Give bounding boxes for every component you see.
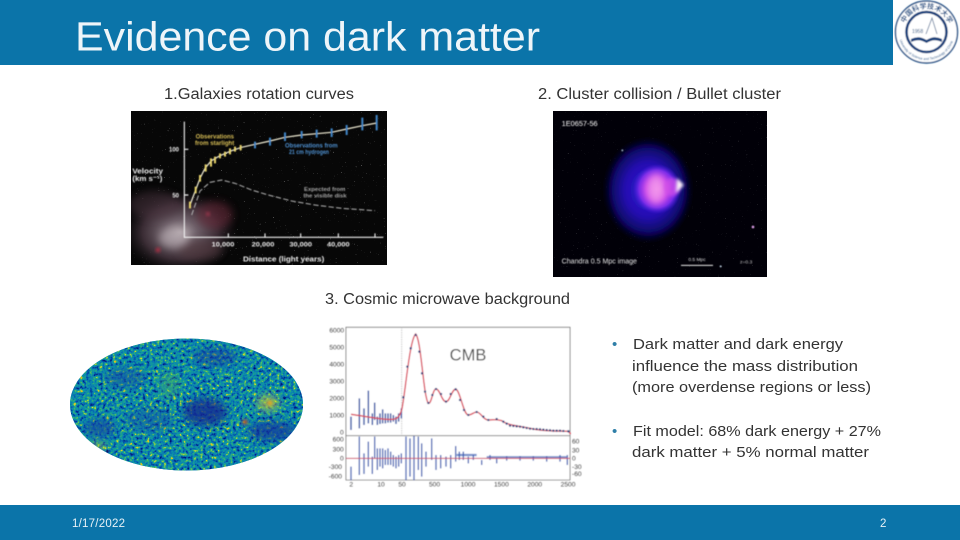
bullet text: dark matter and energy: • (612, 336, 617, 353)
chart labels (132, 134, 350, 264)
axis labels: 1000 (329, 412, 344, 419)
axis labels: 0 (340, 430, 344, 437)
axis labels: 2000 (527, 482, 542, 489)
chart labels: Distance (light years) (243, 255, 325, 264)
bullet text: fit model: • (612, 423, 617, 440)
best-fit spectrum curve (351, 334, 571, 434)
footer date: 1/17/2022 (72, 518, 125, 530)
panel: CMB power spectrum (329, 327, 582, 489)
panel: rotation curve chart (122, 111, 387, 274)
chart labels: Expected from (304, 187, 346, 193)
axes (184, 122, 383, 237)
chart labels: 40,000 (327, 243, 350, 249)
plot frame (346, 327, 570, 480)
axis labels: 5000 (329, 344, 344, 351)
axis labels: 2000 (329, 396, 344, 403)
axis labels: 1500 (494, 482, 509, 489)
chart labels: 21 cm hydrogen (289, 150, 329, 156)
residual zero line (346, 457, 570, 460)
chart labels: 30,000 (289, 243, 313, 249)
hydrogen data (255, 115, 377, 148)
expected disk curve (192, 180, 375, 215)
data points (403, 335, 568, 431)
chart labels: 100 (169, 148, 180, 154)
header band (0, 0, 893, 65)
axis labels: -30 (572, 464, 582, 471)
bright shock front (676, 178, 684, 193)
axis labels: 300 (333, 447, 344, 454)
residual data band (457, 455, 567, 457)
icon: university seal (894, 0, 959, 65)
heading: cosmic microwave background: 3. Cosmic microwave background (325, 291, 570, 308)
axis labels: 6000 (329, 327, 344, 334)
panel: bullet cluster image: z=0.3 (740, 260, 753, 266)
bullet text: dark matter and energy: Dark matter and dark energy (633, 336, 844, 353)
panel: CMB sky map (70, 338, 304, 472)
bullet text: fit model: Fit model: 68% dark energy + 27% (633, 423, 881, 440)
axis labels: -600 (329, 474, 342, 481)
panel: bullet cluster image: 0.5 Mpc (688, 257, 706, 262)
CMB label: CMB (450, 346, 486, 365)
chart labels: Velocity (132, 166, 164, 175)
chart labels: (km s⁻¹) (132, 174, 163, 183)
footer band (0, 505, 960, 540)
galaxy photo (131, 188, 236, 265)
chart labels: Observations (196, 134, 235, 140)
footer page number: 2 (880, 518, 886, 530)
starlight data (190, 145, 241, 208)
axis labels: 2 (349, 482, 353, 489)
axis labels: 30 (572, 447, 580, 454)
pink core (633, 164, 681, 214)
chart labels: 20,000 (252, 243, 275, 249)
axis labels: 4000 (329, 361, 344, 368)
axis labels: -60 (572, 471, 582, 478)
panel: bullet cluster image (553, 111, 767, 277)
title: Evidence on dark matter (75, 14, 540, 60)
cold and hot regions (84, 348, 296, 452)
bullet text: dark matter and energy: (more overdense regions or less) (632, 379, 871, 396)
axis labels: 3000 (329, 379, 344, 386)
axis labels: -300 (329, 464, 342, 471)
axis labels: 1000 (461, 482, 476, 489)
axis labels: 0 (340, 455, 344, 462)
icon: university seal: 1958 (912, 29, 923, 35)
heading: galaxies rotation curves: 1.Galaxies rotation curves (164, 86, 354, 103)
panel: bullet cluster image: 1E0657-56 (562, 119, 598, 128)
observed rotation curve (190, 123, 377, 205)
axis labels: 60 (572, 438, 580, 445)
axis labels: 2500 (561, 482, 576, 489)
bullet text: dark matter and energy (612, 336, 871, 396)
heading: bullet cluster: 2. Cluster collision / Bullet cluster (538, 86, 781, 103)
bullet text: dark matter and energy: influence the mass distribution (632, 358, 858, 375)
chart labels: from starlight (195, 141, 234, 147)
axis labels: 50 (398, 482, 406, 489)
residual bars (351, 436, 567, 480)
chart labels: the visible disk (303, 193, 347, 199)
axis labels: 500 (429, 482, 440, 489)
bullet text: fit model (612, 423, 881, 461)
axis labels: 10 (377, 482, 385, 489)
icon: university seal: University of Science and Technology of China (899, 39, 954, 60)
chart labels: Observations from (285, 144, 338, 150)
axis labels: 0 (572, 455, 576, 462)
chart labels: 50 (172, 193, 180, 199)
blue halo (602, 136, 694, 244)
axis labels (329, 327, 582, 489)
axis labels: 600 (333, 436, 344, 443)
bullet text: fit model: dark matter + 5% normal matter (632, 444, 869, 461)
data error bars (351, 391, 401, 430)
chart labels: 10,000 (212, 243, 235, 249)
icon: university seal: 中国科学技术大学 (900, 2, 954, 24)
panel: bullet cluster image: Chandra 0.5 Mpc image (562, 257, 637, 266)
